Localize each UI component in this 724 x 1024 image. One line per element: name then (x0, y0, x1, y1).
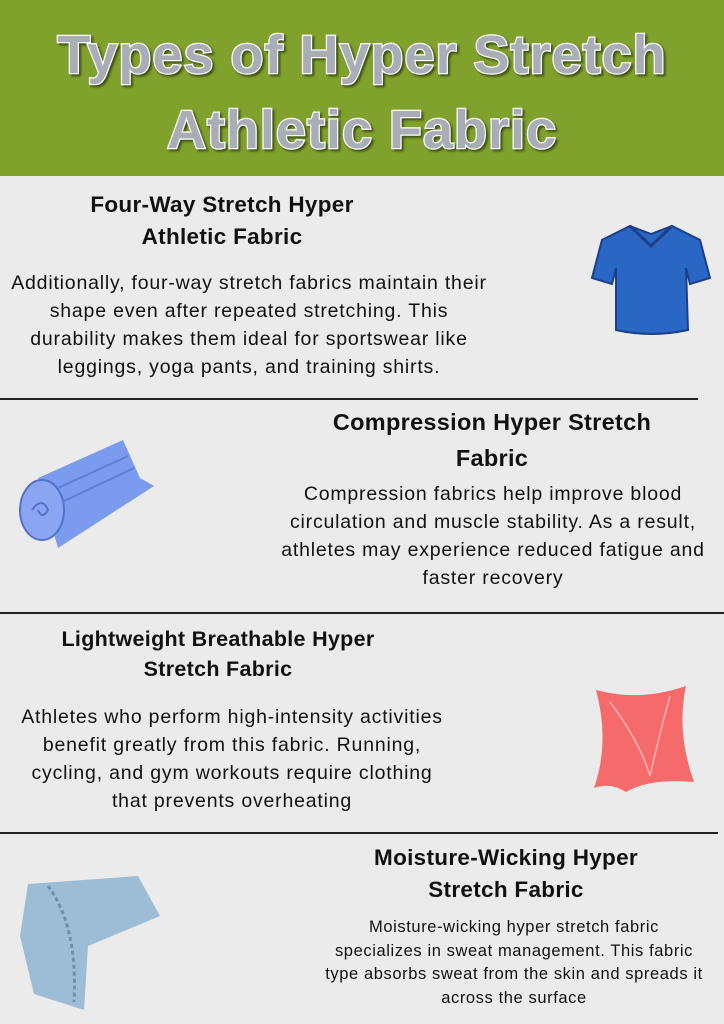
body text: across the surface (441, 988, 587, 1006)
heading: Compression Hyper Stretch (333, 409, 651, 435)
body text: faster recovery (423, 567, 563, 589)
icon: denim patch (20, 876, 160, 1010)
heading: Moisture-Wicking Hyper (374, 845, 638, 870)
body text: Additionally, four-way stretch fabrics maintain their (11, 272, 487, 294)
body text (281, 483, 705, 589)
body text (11, 272, 487, 378)
title banner (0, 0, 724, 176)
body text: type absorbs sweat from the skin and spreads it (325, 965, 703, 983)
title (56, 25, 667, 160)
icon: fabric roll (19, 440, 154, 548)
heading (333, 409, 651, 471)
panel: compression (19, 409, 705, 589)
body text: Compression fabrics help improve blood (304, 483, 682, 505)
heading: Lightweight Breathable Hyper (61, 627, 375, 651)
heading (90, 192, 354, 249)
icon: t-shirt (590, 224, 712, 335)
body text (325, 918, 703, 1006)
heading: Four-Way Stretch Hyper (90, 192, 354, 217)
heading: Athletic Fabric (142, 224, 302, 249)
title: Athletic Fabric (167, 100, 557, 160)
panel: moisture-wicking (20, 845, 703, 1010)
body text: athletes may experience reduced fatigue and (281, 539, 705, 561)
heading: Stretch Fabric (428, 877, 584, 902)
body text: benefit greatly from this fabric. Running, (43, 734, 421, 756)
body text: circulation and muscle stability. As a result, (290, 511, 696, 533)
body text: leggings, yoga pants, and training shirts. (58, 356, 440, 378)
body text (21, 706, 443, 812)
panel: lightweight (21, 627, 694, 812)
body text: durability makes them ideal for sportswear like (30, 328, 468, 350)
heading (61, 627, 375, 681)
icon: red cloth (594, 686, 694, 792)
heading: Fabric (456, 445, 528, 471)
body text: specializes in sweat management. This fabric (335, 942, 693, 960)
body text: that prevents overheating (112, 790, 352, 812)
body text: cycling, and gym workouts require clothing (31, 762, 433, 784)
body text: shape even after repeated stretching. This (50, 300, 448, 322)
panel: four-way (11, 192, 712, 378)
heading (374, 845, 638, 902)
heading: Stretch Fabric (144, 657, 292, 681)
body text: Moisture-wicking hyper stretch fabric (369, 918, 659, 936)
title: Types of Hyper Stretch (57, 25, 667, 85)
body text: Athletes who perform high-intensity activities (21, 706, 443, 728)
